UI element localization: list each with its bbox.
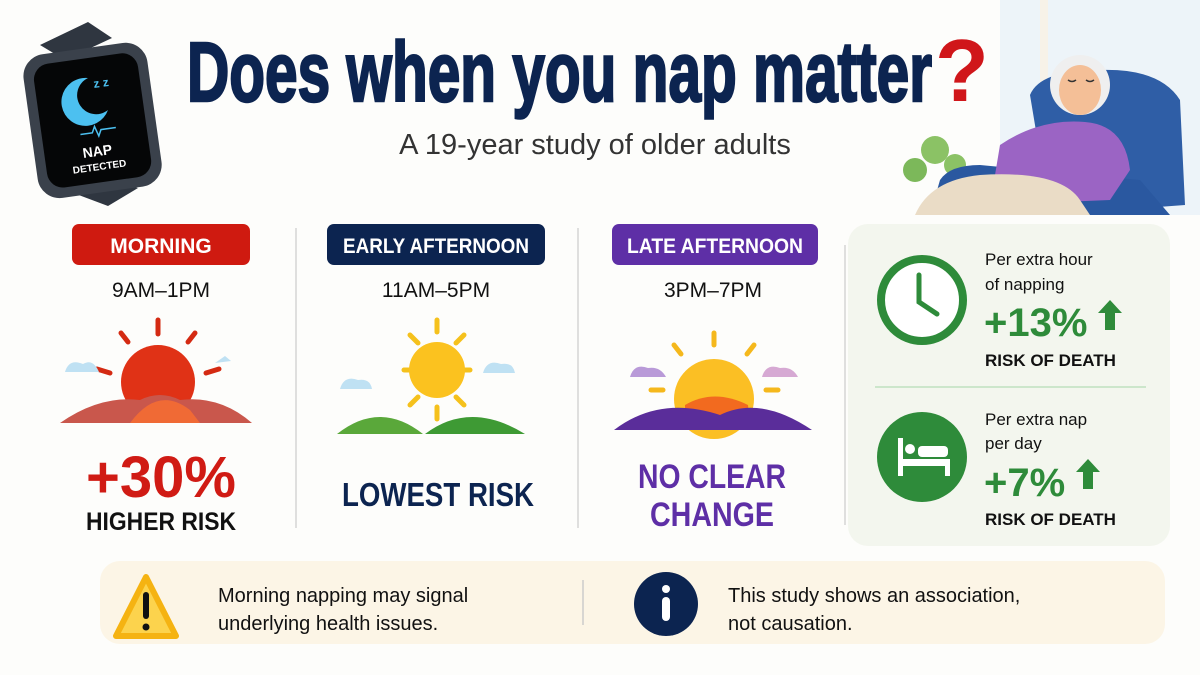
title: ? [935,21,989,120]
panel: dose-response stats [845,224,1170,546]
stat: per extra hour [984,250,1122,370]
icon: smartwatch [21,22,165,206]
stat: per extra nap: +7% [984,461,1065,505]
text: association note [728,585,1020,635]
stat: per extra hour: of napping [985,275,1064,294]
label pill: morning: MORNING [110,235,212,258]
icon: warning triangle [116,577,176,636]
stat: +30%: +30% [86,445,236,510]
text: morning napping warning [218,585,468,635]
stat: per extra nap: Per extra nap [985,410,1087,429]
stat: per extra nap: RISK OF DEATH [985,510,1116,529]
time range: 11AM–5PM [382,279,490,302]
icon: yellow sun with green hills [337,320,525,434]
label pill: late afternoon: LATE AFTERNOON [627,235,803,258]
icon: info circle [634,572,698,636]
subtitle: A 19-year study of older adults [399,129,791,161]
stat: per extra hour: Per extra hour [985,250,1093,269]
icon: bed [877,412,967,502]
time range: 3PM–7PM [664,279,762,302]
illustration: woman napping in armchair [903,0,1200,215]
text: association note: not causation. [728,613,853,635]
stat: per extra hour: RISK OF DEATH [985,351,1116,370]
stat label: HIGHER RISK [86,508,236,536]
panel: late afternoon [612,224,818,534]
icon: smartwatch: z z [92,75,110,91]
icon: red rising sun [60,320,252,423]
label pill: late afternoon [612,224,818,265]
icon: smartwatch: NAP [82,141,113,161]
stat: lowest risk: LOWEST RISK [342,476,534,513]
panel: morning [60,224,252,536]
time range: 9AM–1PM [112,279,210,302]
text: association note: This study shows an association, [728,585,1020,607]
stat: per extra nap [984,410,1116,529]
text: morning napping warning: underlying health issues. [218,613,438,635]
text: morning napping warning: Morning napping may signal [218,585,468,607]
icon: smartwatch: DETECTED [72,158,127,177]
label pill: early afternoon [327,224,545,265]
label pill: early afternoon: EARLY AFTERNOON [343,235,529,258]
stat: no clear change [638,458,786,534]
icon: clock [881,259,963,341]
icon: setting sun with purple hills [614,333,812,439]
panel: early afternoon [327,224,545,513]
stat: per extra hour: +13% [984,301,1087,345]
stat: no clear change: NO CLEAR [638,458,786,496]
stat: per extra nap: per day [985,434,1042,453]
callout banner [100,561,1165,644]
label pill: morning [72,224,250,265]
stat: no clear change: CHANGE [650,496,774,534]
